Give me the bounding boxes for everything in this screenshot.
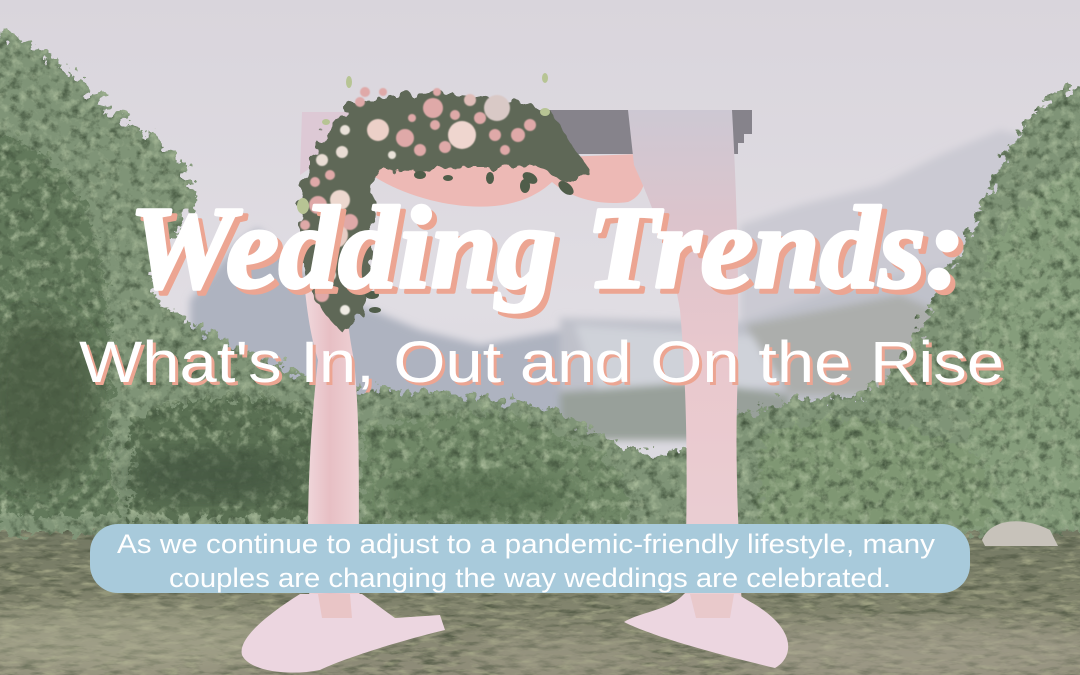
intro callout (90, 524, 970, 593)
top left drape (300, 112, 352, 175)
subtitle: What's In, Out and On the Rise (79, 330, 1004, 395)
title: Wedding Trends: Wedding Trends: (129, 182, 965, 313)
right drape pool (624, 594, 788, 668)
tree line foliage (0, 33, 1080, 535)
scattered leaves (365, 170, 576, 313)
wedding arch (242, 73, 788, 673)
title: Wedding Trends: Wedding Trends: (134, 187, 970, 318)
garland foliage (299, 93, 590, 330)
left post drape (305, 290, 360, 610)
pink swag drape (360, 154, 645, 207)
rock (982, 521, 1058, 546)
intro callout: As we continue to adjust to a pandemic-friendly lifestyle, many (117, 529, 936, 559)
right post drape (628, 110, 742, 610)
subtitle: What's In, Out and On the Rise (82, 333, 1007, 398)
flower garland (297, 73, 590, 330)
roses (300, 87, 536, 315)
arch wooden beam (540, 110, 752, 154)
grass ground (0, 510, 1080, 675)
intro callout: couples are changing the way weddings are celebrated. (169, 563, 891, 593)
distant mountains (190, 130, 1080, 440)
light leaves and stems (297, 73, 550, 214)
left drape pool (242, 594, 445, 673)
